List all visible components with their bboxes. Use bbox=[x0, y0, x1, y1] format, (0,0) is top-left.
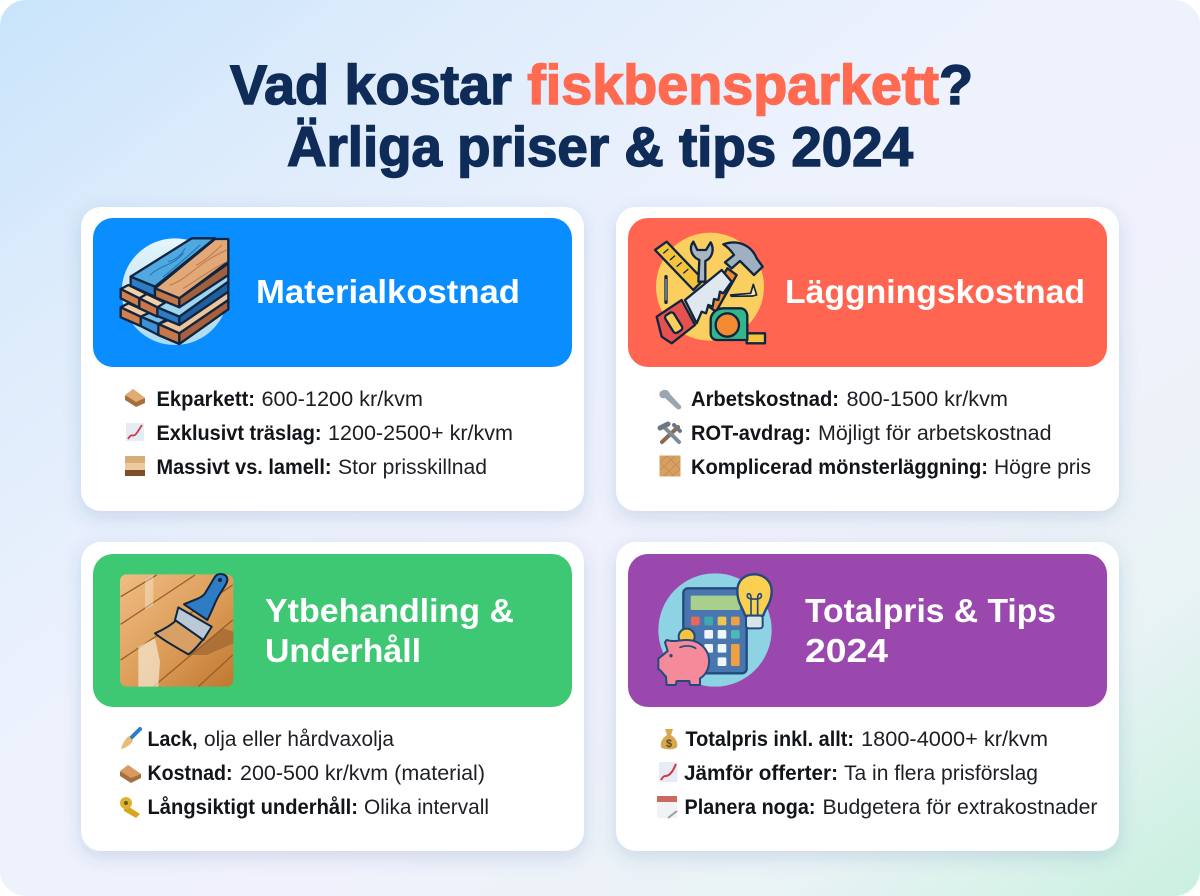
title: Vad kostar fiskbensparkett? bbox=[230, 53, 973, 116]
panel: Totalpris och Tips bbox=[616, 542, 1119, 851]
icon: paintbrush bbox=[121, 729, 140, 749]
text: 600-1200 kr/kvm bbox=[262, 388, 423, 411]
list item: Massivt vs. lamell bbox=[125, 456, 487, 479]
heading: Materialkostnad bbox=[256, 273, 520, 310]
text: 1800-4000+ kr/kvm bbox=[861, 728, 1048, 751]
text: olja eller hårdvaxolja bbox=[204, 728, 394, 751]
heading: Ytbehandling & bbox=[265, 592, 514, 629]
text: Totalpris inkl. allt: bbox=[686, 728, 854, 751]
icon: calculator, piggy bank and light bulb bbox=[658, 573, 772, 687]
icon: chart bbox=[126, 423, 144, 441]
header band bbox=[628, 554, 1107, 707]
text: Kostnad: bbox=[148, 762, 232, 785]
text: Ekparkett: bbox=[156, 388, 255, 411]
text: Massivt vs. lamell: bbox=[156, 456, 332, 479]
list item: Planera noga bbox=[657, 796, 1098, 819]
heading: Totalpris & Tips bbox=[805, 592, 1056, 629]
text: 1200-2500+ kr/kvm bbox=[328, 422, 513, 445]
heading: Läggningskostnad bbox=[785, 273, 1085, 310]
list item: Arbetskostnad bbox=[659, 388, 1008, 411]
icon: wood bbox=[125, 389, 145, 407]
icon: carpentry tools bbox=[655, 233, 765, 343]
list item: Exklusivt träslag bbox=[126, 422, 513, 445]
list item: Komplicerad mönsterläggning bbox=[660, 456, 1091, 479]
header band bbox=[93, 218, 572, 367]
text: Komplicerad mönsterläggning: bbox=[691, 456, 988, 479]
text: Ta in flera prisförslag bbox=[844, 762, 1038, 785]
header band bbox=[628, 218, 1107, 367]
text: Stor prisskillnad bbox=[338, 456, 487, 479]
text: 200-500 kr/kvm (material) bbox=[240, 762, 485, 785]
list item: Långsiktigt underhåll bbox=[120, 796, 489, 819]
card background bbox=[616, 207, 1119, 511]
list item: Ekparkett bbox=[125, 388, 423, 411]
list item: ROT-avdrag bbox=[660, 422, 1052, 445]
list item: Totalpris bbox=[661, 728, 1048, 751]
title: Ärliga priser & tips 2024 bbox=[287, 115, 913, 178]
text: Exklusivt träslag: bbox=[156, 422, 322, 445]
heading: Underhåll bbox=[265, 632, 421, 669]
text bbox=[156, 422, 513, 445]
text: Långsiktigt underhåll: bbox=[148, 796, 358, 819]
panel: Materialkostnad bbox=[81, 207, 584, 511]
text: Budgetera för extrakostnader bbox=[822, 796, 1098, 819]
heading: 2024 bbox=[805, 632, 889, 669]
text bbox=[156, 388, 423, 411]
list item: Jämför offerter bbox=[659, 762, 1038, 785]
card background bbox=[616, 542, 1119, 851]
icon: wrench bbox=[659, 390, 681, 409]
text: Lack, bbox=[148, 728, 198, 751]
list item: Kostnad bbox=[120, 762, 485, 785]
text: Möjligt för arbetskostnad bbox=[818, 422, 1052, 445]
text: Jämför offerter: bbox=[684, 762, 838, 785]
icon: hammer and wrench bbox=[660, 424, 680, 442]
text bbox=[686, 728, 1048, 751]
text bbox=[148, 796, 489, 819]
icon: chart bbox=[659, 762, 678, 782]
heading bbox=[265, 592, 514, 669]
text bbox=[684, 796, 1098, 819]
panel: Ytbehandling och Underhåll bbox=[81, 542, 584, 851]
card background bbox=[81, 207, 584, 511]
text bbox=[691, 388, 1008, 411]
icon: money bag bbox=[661, 729, 677, 750]
list item: Lack bbox=[121, 728, 394, 751]
panel: Läggningskostnad bbox=[616, 207, 1119, 511]
icon: wood bbox=[120, 765, 141, 783]
icon: paintbrush on wood floor bbox=[120, 574, 233, 687]
text bbox=[684, 762, 1038, 785]
card background bbox=[81, 542, 584, 851]
text: Arbetskostnad: bbox=[691, 388, 839, 411]
text: Planera noga: bbox=[684, 796, 816, 819]
header band bbox=[93, 554, 572, 707]
heading bbox=[805, 592, 1056, 669]
text: 800-1500 kr/kvm bbox=[846, 388, 1008, 411]
text: Högre pris bbox=[994, 456, 1091, 479]
text: ROT-avdrag: bbox=[691, 422, 811, 445]
icon: calendar bbox=[657, 796, 677, 818]
text: Olika intervall bbox=[364, 796, 489, 819]
icon: parquet bbox=[660, 456, 680, 476]
icon: stacked wood planks bbox=[121, 238, 228, 345]
icon: money bag: $ bbox=[666, 738, 672, 750]
title bbox=[230, 53, 973, 178]
text bbox=[691, 422, 1052, 445]
icon: wood block bbox=[125, 456, 145, 476]
icon: tape measure bbox=[120, 797, 140, 818]
text bbox=[156, 456, 487, 479]
